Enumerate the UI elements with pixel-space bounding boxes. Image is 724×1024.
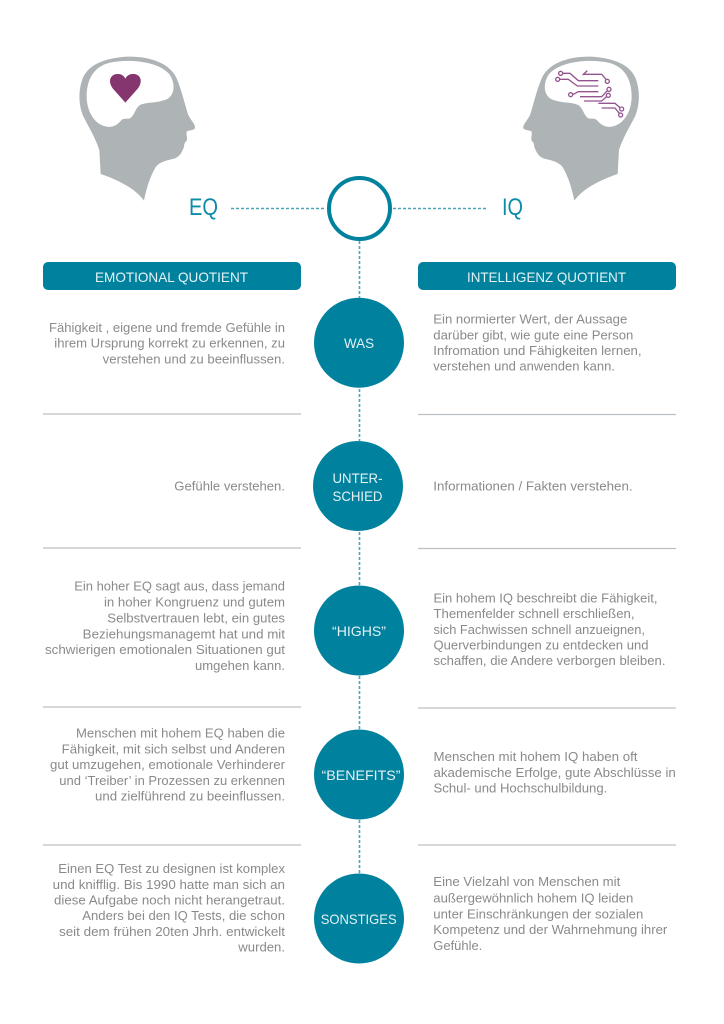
text: EQ sonstiges: Einen EQ Test zu designen ist komplex bbox=[58, 861, 285, 876]
circle: HIGHS: “HIGHS” bbox=[332, 623, 386, 639]
circle: HIGHS bbox=[314, 586, 404, 676]
text: IQ sonstiges: unter Einschränkungen der sozialen bbox=[433, 906, 643, 921]
text: IQ highs: Ein hohem IQ beschreibt die Fähigkeit, bbox=[434, 591, 658, 606]
text: IQ was bbox=[433, 311, 642, 374]
text: IQ unterschied: Informationen / Fakten verstehen. bbox=[433, 479, 633, 494]
circle: SONSTIGES bbox=[314, 874, 404, 964]
text: EQ sonstiges bbox=[53, 861, 285, 954]
text: IQ benefits: akademische Erfolge, gute Abschlüsse in bbox=[434, 765, 676, 780]
text: EQ was: ihrem Ursprung korrekt zu erkennen, zu bbox=[54, 336, 285, 351]
text: IQ benefits bbox=[434, 749, 676, 796]
circle: SONSTIGES: SONSTIGES bbox=[321, 911, 397, 927]
text: EQ was bbox=[49, 320, 285, 366]
heading: EQ: EQ bbox=[189, 194, 218, 221]
circle: BENEFITS: “BENEFITS” bbox=[322, 767, 401, 783]
text: EQ benefits: Menschen mit hohem EQ haben die bbox=[76, 726, 285, 741]
header bar: Intelligenz Quotient bbox=[418, 262, 676, 290]
circle: WAS bbox=[314, 298, 404, 388]
row dividers bbox=[43, 414, 676, 845]
header bar: Intelligenz Quotient: INTELLIGENZ QUOTIENT bbox=[467, 269, 626, 285]
heading: IQ: IQ bbox=[502, 194, 523, 221]
text: EQ highs: schwierigen emotionalen Situationen gut bbox=[45, 642, 285, 657]
text: IQ highs: Themenfelder schnell erschließen, bbox=[434, 606, 634, 621]
text: EQ was: Fähigkeit , eigene und fremde Gefühle in bbox=[49, 320, 285, 335]
text: IQ sonstiges bbox=[433, 874, 668, 953]
circle: WAS: WAS bbox=[344, 335, 374, 351]
text: IQ was: verstehen und anwenden kann. bbox=[433, 359, 615, 374]
text: EQ was: verstehen und zu beeinflussen. bbox=[103, 351, 285, 366]
text: IQ benefits: Menschen mit hohem IQ haben oft bbox=[434, 749, 638, 764]
icon: EQ head with heart bbox=[79, 57, 195, 201]
text: IQ was: Infromation und Fähigkeiten lernen, bbox=[433, 343, 642, 358]
text: EQ benefits: gut umzugehen, emotionale Verhinderer bbox=[50, 757, 286, 772]
circle: UNTERSCHIED: UNTER- bbox=[332, 470, 383, 486]
text: IQ was: darüber gibt, wie gute eine Person bbox=[433, 327, 633, 342]
text: EQ benefits: und ‘Treiber’ in Prozessen zu erkennen bbox=[59, 773, 285, 788]
text: EQ sonstiges: Anders bei den IQ Tests, die schon bbox=[82, 908, 285, 923]
text: IQ sonstiges: Eine Vielzahl von Menschen mit bbox=[433, 874, 621, 889]
text: EQ highs bbox=[45, 579, 286, 673]
text: IQ sonstiges: Kompetenz und der Wahrnehmung ihrer bbox=[433, 922, 668, 937]
text: EQ highs: in hoher Kongruenz und gutem bbox=[104, 595, 285, 610]
text: EQ highs: Selbstvertrauen lebt, ein gutes bbox=[107, 610, 286, 625]
text: EQ benefits bbox=[50, 726, 286, 804]
text: EQ benefits: und zielführend zu beeinflussen. bbox=[95, 789, 285, 804]
text: EQ highs: Ein hoher EQ sagt aus, dass jemand bbox=[74, 579, 285, 594]
top ring bbox=[329, 178, 390, 239]
dashed connectors bbox=[231, 208, 488, 873]
text: EQ sonstiges: und knifflig. Bis 1990 hatte man sich an bbox=[53, 877, 285, 892]
text: EQ sonstiges: wurden. bbox=[237, 940, 285, 954]
text: IQ highs: sich Fachwissen schnell anzueignen, bbox=[434, 622, 645, 637]
circle: UNTERSCHIED: SCHIED bbox=[332, 488, 382, 504]
text: IQ highs bbox=[434, 591, 666, 668]
text: EQ benefits: Fähigkeit, mit sich selbst und Anderen bbox=[62, 741, 285, 756]
text: IQ sonstiges: Gefühle. bbox=[433, 938, 482, 953]
text: EQ unterschied: Gefühle verstehen. bbox=[174, 478, 285, 494]
header bar: Emotional Quotient bbox=[43, 262, 301, 290]
circle: UNTERSCHIED bbox=[313, 441, 403, 531]
text: EQ sonstiges: diese Aufgabe noch nicht herangetraut. bbox=[54, 892, 285, 908]
text: IQ sonstiges: außergewöhnlich hohem IQ leiden bbox=[433, 890, 633, 905]
icon: IQ head with circuit brain bbox=[523, 57, 639, 201]
text: IQ highs: schaffen, die Andere verborgen bleiben. bbox=[434, 653, 666, 668]
text: EQ highs: Beziehungsmanagemt hat und mit bbox=[83, 626, 285, 641]
text: IQ was: Ein normierter Wert, der Aussage bbox=[433, 311, 627, 326]
text: EQ sonstiges: seit dem frühen 20ten Jhrh. entwickelt bbox=[59, 924, 285, 939]
circle: BENEFITS bbox=[314, 730, 404, 820]
text: IQ benefits: Schul- und Hochschulbildung. bbox=[434, 780, 607, 796]
text: IQ highs: Querverbindungen zu entdecken und bbox=[434, 638, 648, 652]
text: EQ highs: umgehen kann. bbox=[195, 658, 285, 673]
header bar: Emotional Quotient: EMOTIONAL QUOTIENT bbox=[95, 269, 248, 285]
